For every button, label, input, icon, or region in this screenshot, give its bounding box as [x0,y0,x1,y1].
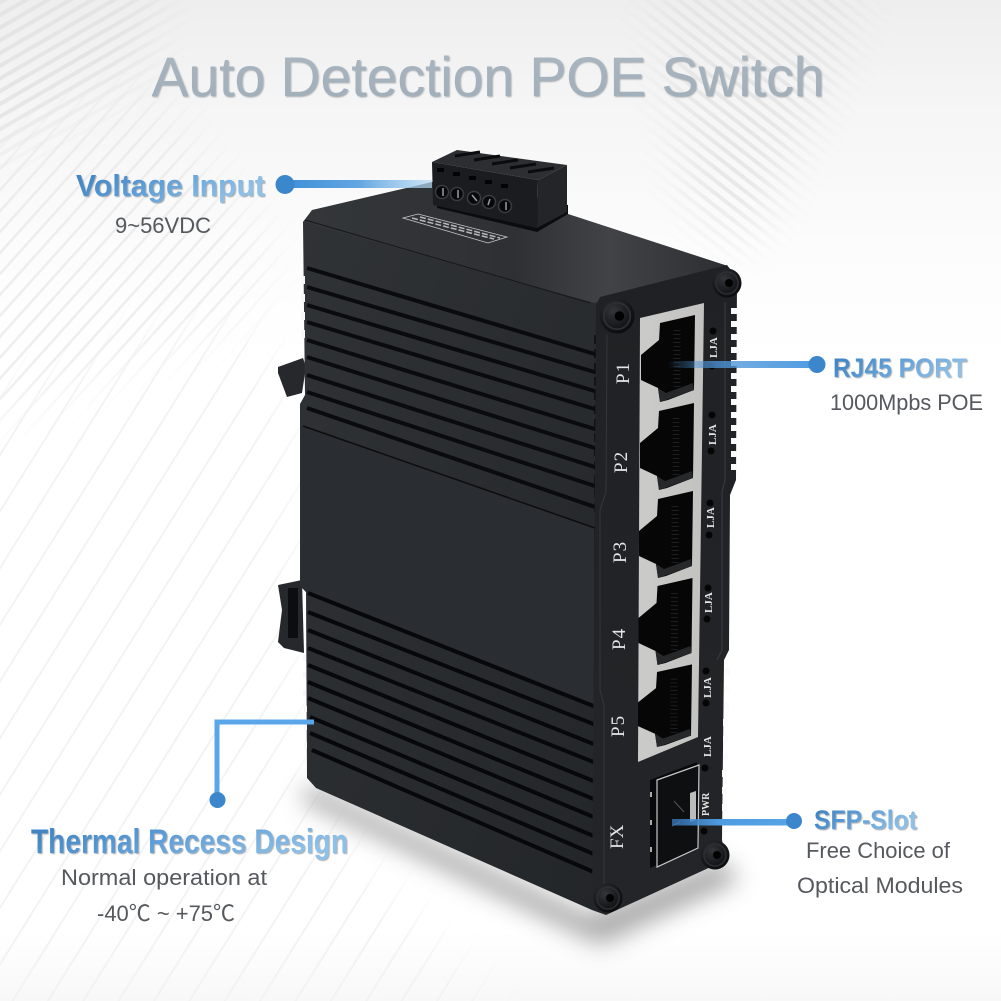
DIN clip lower [278,580,304,653]
front face [592,265,737,915]
heading: RJ45 port: RJ45 PORT [833,353,967,383]
connector line: RJ45 [668,361,817,368]
port labels: LJA [702,736,714,757]
port labels [607,337,720,849]
port labels: P5 [608,715,629,737]
port labels: FX [607,824,628,849]
left edge notches [301,276,307,748]
connector line: voltage [285,180,432,188]
callout: thermal recess design [31,722,348,926]
connector elbow: thermal [217,722,314,800]
front-left edge line [600,335,607,885]
terminal sticker label [403,214,507,243]
RJ45 port 3 [639,491,693,578]
right rail line [717,302,725,660]
SFP slot [650,762,699,868]
port labels: LJA [708,337,720,358]
left face [300,211,600,910]
RJ45 port 4 [638,578,692,665]
RJ45 port 5 [638,664,692,747]
text: thermal line 2: -40℃ ~ +75℃ [97,901,235,926]
heading: voltage input: Voltage Input [76,168,265,203]
RJ45 port 1 [641,315,695,402]
dot: thermal [210,792,226,808]
corner screws [594,268,742,912]
port labels: P2 [611,451,632,473]
text: thermal line 1: Normal operation at [61,865,267,890]
device shadow [300,785,740,945]
port labels: LJA [705,507,717,528]
text: SFP line 1: Free Choice of [806,838,951,863]
upper cooling grooves [307,268,598,508]
port labels: LJA [702,677,714,698]
connector line: SFP [672,819,794,826]
RJ45 port 2 [640,403,694,490]
silver RJ45 frame [638,303,704,762]
text: voltage range: 9~56VDC [115,213,211,238]
heading: SFP slot: SFP-Slot [814,805,917,835]
port labels: LJA [707,424,719,445]
port labels: P1 [613,362,634,384]
lower cooling grooves [308,593,596,873]
callout: voltage input [76,168,432,238]
title: Auto Detection POE Switch [152,46,824,108]
port labels: P3 [610,541,631,563]
callout: RJ45 port [668,353,983,415]
LED indicators [700,328,716,834]
dot: RJ45 [808,356,826,373]
middle flat panel [301,426,595,705]
text: RJ45 speed: 1000Mpbs POE [830,390,983,415]
top face [303,182,728,303]
top ridge line [305,220,590,303]
dot: SFP [786,813,802,829]
right edge teeth [722,308,737,811]
DIN clip upper [278,358,306,397]
text: SFP line 2: Optical Modules [797,873,963,898]
heading: thermal recess design: Thermal Recess Design [31,823,348,861]
switch device [278,150,742,915]
callout: SFP slot [672,805,963,898]
port labels: PWR [701,792,712,816]
port labels: LJA [703,592,715,613]
dashed groove ends [594,335,596,515]
dot: voltage [276,175,294,194]
terminal block [432,150,568,232]
port labels: P4 [609,628,630,650]
